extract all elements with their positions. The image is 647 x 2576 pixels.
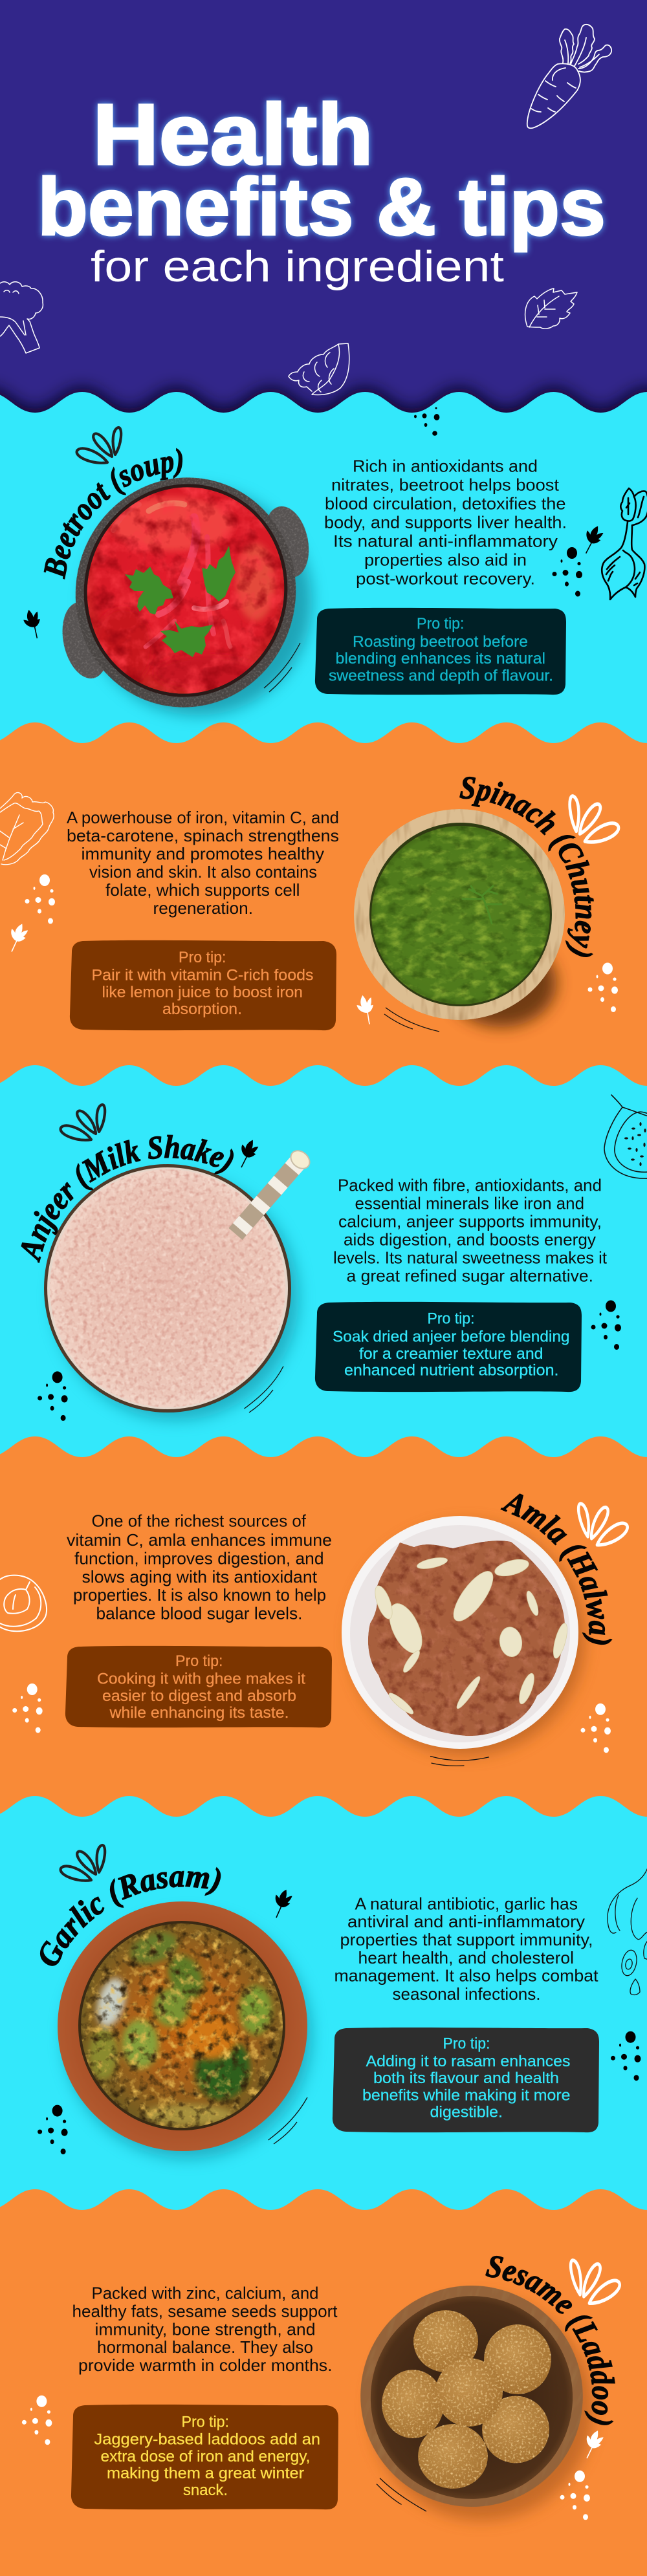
panel: sesame background [0,2189,647,2576]
callout: pro tip [333,2028,599,2132]
title line: Health: Health [93,87,373,183]
header wave shadow [0,376,647,413]
heading: Amla (Halwa): Amla (Halwa) [500,1493,613,1645]
callout: pro tip: Pro tip: [443,2035,490,2053]
bowl: milkshake photo [44,1147,313,1420]
bowl: rasam photo [58,1901,312,2159]
decor: sprig [269,1887,294,1920]
text block: regeneration. [153,898,253,918]
coriander sprig [463,886,501,924]
icon: petals [61,1105,105,1140]
callout: pro tip [70,940,336,1030]
text block: management. It also helps combat [334,1966,598,1986]
text block: function, improves digestion, and [74,1548,324,1568]
callout: pro tip: sweetness and depth of flavour. [329,667,553,684]
rasam surface with leaves and spices [81,1923,283,2128]
parsley leaves [125,546,236,657]
callout: pro tip [65,1646,332,1727]
icon: pea pod outline [289,343,349,395]
icon: petals [578,1497,629,1548]
callout: pro tip: benefits while making it more [362,2086,571,2105]
icon: carrot outline [527,25,611,128]
callout: pro tip: Pro tip: [427,1310,475,1327]
text block: Packed with zinc, calcium, and [92,2283,318,2302]
motion lines [245,1366,283,1412]
decor: white dots left [25,874,55,924]
text block: immunity, bone strength, and [94,2319,315,2339]
straw [236,1147,313,1234]
section: amla [0,1493,629,1766]
callout: pro tip: Pro tip: [179,949,226,966]
text block [324,457,567,589]
callout: pro tip: Pro tip: [417,615,465,633]
decor: white dots right [587,962,618,1012]
motion lines [430,1757,489,1766]
text block: hormonal balance. They also [97,2337,313,2357]
panel: amla background [0,1436,647,2576]
callout: pro tip: both its flavour and health [373,2070,559,2087]
text block [72,2283,338,2375]
text block: levels. Its natural sweetness makes it [333,1248,608,1268]
text block: immunity and promotes healthy [82,844,324,863]
heading: Spinach (Chutney): Spinach (Chutney) [459,776,594,957]
icon: garlic outline [608,1866,647,1995]
title [38,87,606,291]
icon: petals [570,796,619,842]
title line: benefits and tips: benefits & tips [38,162,606,252]
decor: dots left [38,1371,68,1421]
header background [0,0,647,427]
text block: vision and skin. It also contains [89,862,317,882]
callout: pro tip: easier to digest and absorb [102,1687,296,1705]
text block: Its natural anti-inflammatory [333,532,558,551]
decor: dots near header [414,407,439,436]
text block: A natural antibiotic, garlic has [355,1894,578,1913]
decor: sprig [234,1137,261,1171]
text block: essential minerals like iron and [355,1194,584,1213]
callout: pro tip: for a creamier texture and [359,1345,543,1363]
panel: spinach background [0,722,647,2576]
callout: pro tip: like lemon juice to boost iron [102,984,303,1001]
text block: a great refined sugar alternative. [347,1266,593,1286]
text block: A powerhouse of iron, vitamin C, and [67,808,339,827]
heading: Sesame (Laddoo): Sesame (Laddoo) [485,2256,615,2425]
motion lines [384,1008,439,1032]
callout: pro tip [315,1302,582,1392]
bowl: amla halwa photo [342,1516,585,1755]
section: anjeer [21,1094,647,1428]
decor: dots right [591,1300,621,1350]
text block: properties also aid in [364,550,527,569]
text block: heart health, and cholesterol [358,1948,574,1967]
text block: Rich in antioxidants and [353,457,538,476]
callout: pro tip: Jaggery-based laddoos add an [94,2430,320,2449]
text block: seasonal infections. [392,1984,541,2004]
motion lines [268,2097,307,2144]
decor: dots left [38,2105,68,2154]
decor: white dots right [560,2471,590,2520]
decor: white dots left [22,2396,52,2445]
text block: properties. It is also known to help [73,1585,326,1605]
icon: lettuce outline [0,793,54,865]
bowl: beetroot soup photo [62,477,320,726]
callout: pro tip: extra dose of iron and energy, [101,2448,311,2465]
callout: pro tip: Cooking it with ghee makes it [97,1670,305,1688]
text block: Packed with fibre, antioxidants, and [338,1176,602,1195]
panel: anjeer background [0,1065,647,2576]
icon: petals [77,428,121,463]
motion lines [377,2478,426,2511]
callout: pro tip: Pro tip: [181,2414,229,2430]
decor: sprigs [21,523,606,640]
text block: provide warmth in colder months. [78,2355,333,2375]
callout: pro tip [71,2405,338,2509]
text block: properties that support immunity, [340,1930,593,1949]
heading: Garlic (Rasam): Garlic (Rasam) [40,1867,221,1966]
text block: calcium, anjeer supports immunity, [338,1212,602,1231]
text block: folate, which supports cell [105,880,300,900]
callout: pro tip: Soak dried anjeer before blending [333,1328,569,1345]
decor: sprig [579,2428,606,2462]
icon: amla outline [0,1575,47,1631]
callout: pro tip: snack. [183,2482,228,2499]
callout: pro tip: Pro tip: [175,1652,223,1670]
callout: pro tip: while enhancing its taste. [109,1704,289,1722]
text block: healthy fats, sesame seeds support [72,2301,338,2321]
callout: pro tip: Roasting beetroot before [353,633,528,651]
laddoos [382,2310,551,2489]
decor: white dots left [12,1683,43,1733]
decor: white sprigs [4,921,377,1026]
icon: broccoli outline [0,282,43,353]
text block: balance blood sugar levels. [96,1604,303,1623]
motion lines [264,643,300,692]
text block [333,1176,608,1286]
icon: leaf outline [525,288,577,329]
text block: antiviral and anti-inflammatory [347,1912,585,1931]
text block: body, and supports liver health. [324,512,567,532]
callout: pro tip: absorption. [162,1001,242,1018]
heading: Anjeer (Milk Shake): Anjeer (Milk Shake) [21,1134,234,1264]
almond slivers [371,1555,570,1716]
decor: dots [553,547,582,596]
heading: Beetroot (soup): Beetroot (soup) [44,448,182,579]
callout: pro tip: making them a great winter [107,2465,304,2482]
text block: vitamin C, amla enhances immune [67,1530,332,1550]
section: beetroot [23,426,647,726]
section: garlic [38,1843,647,2167]
icon: fig outline [604,1095,647,1178]
icon: petals [570,2253,621,2306]
subtitle: for each ingredient [91,242,504,291]
text block [67,1511,332,1623]
callout: pro tip: digestible. [430,2103,503,2121]
text block: One of the richest sources of [92,1511,307,1530]
icon: petals [61,1845,105,1881]
bowl: sesame laddoo photo [329,2254,614,2538]
decor: white dots right [581,1704,611,1753]
text block: nitrates, beetroot helps boost [331,475,560,494]
callout: pro tip [315,608,566,695]
callout: pro tip: blending enhances its natural [335,650,545,667]
text block: blood circulation, detoxifies the [325,494,565,514]
decor: dots right [611,2031,641,2081]
text block: post-workout recovery. [356,569,535,589]
soup surface [87,487,285,694]
text block: slows aging with its antioxidant [82,1567,318,1586]
panel: garlic background [0,1796,647,2576]
callout: pro tip: Pair it with vitamin C-rich foods [92,966,313,984]
callout: pro tip: Adding it to rasam enhances [366,2053,571,2070]
icon: beetroot outline [602,488,647,600]
section: sesame [22,2256,621,2527]
text block: beta-carotene, spinach strengthens [67,826,339,845]
bowl: spinach chutney photo [354,809,565,1027]
section: spinach [0,776,620,1039]
callout: pro tip: enhanced nutrient absorption. [344,1362,559,1379]
text block: aids digestion, and boosts energy [344,1230,596,1250]
text block [334,1894,598,2004]
text block [67,808,339,918]
